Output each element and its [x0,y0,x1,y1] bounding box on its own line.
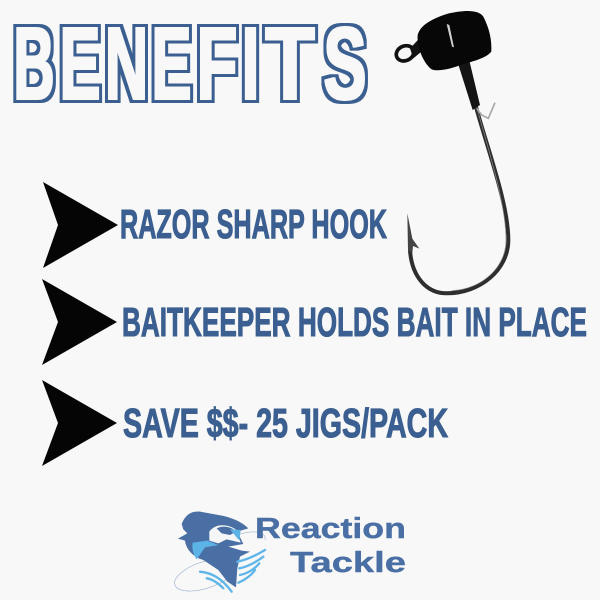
bullet 3: save [42,380,448,466]
text: Tackle: Tackle [290,547,406,579]
title: BENEFITS: B [14,6,54,121]
title: BENEFITS [14,6,366,121]
icon: arrow 3 [42,380,117,466]
bullet 2: baitkeeper [42,279,587,365]
icon: leaping fish [171,512,265,597]
fish body [178,512,250,587]
bullet 1: razor sharp hook [43,182,387,268]
title: BENEFITS: E [60,6,100,121]
icon: arrow 1 [43,182,118,268]
title: BENEFITS: F [196,6,238,121]
title: BENEFITS: S [324,6,366,121]
text: Reaction: Reaction [255,513,406,545]
water splash [200,550,265,592]
text: save 25 jigs per pack: SAVE $$- 25 JIGS/PACK [123,400,448,446]
icon: jig hook [394,11,508,293]
title: BENEFITS: I [242,6,260,121]
logo: Reaction Tackle [171,512,406,597]
title: BENEFITS: T [265,6,315,121]
text: razor sharp hook: RAZOR SHARP HOOK [120,201,387,247]
title: BENEFITS: N [105,6,148,121]
icon: arrow 2 [42,279,117,365]
title: BENEFITS: E [152,6,192,121]
